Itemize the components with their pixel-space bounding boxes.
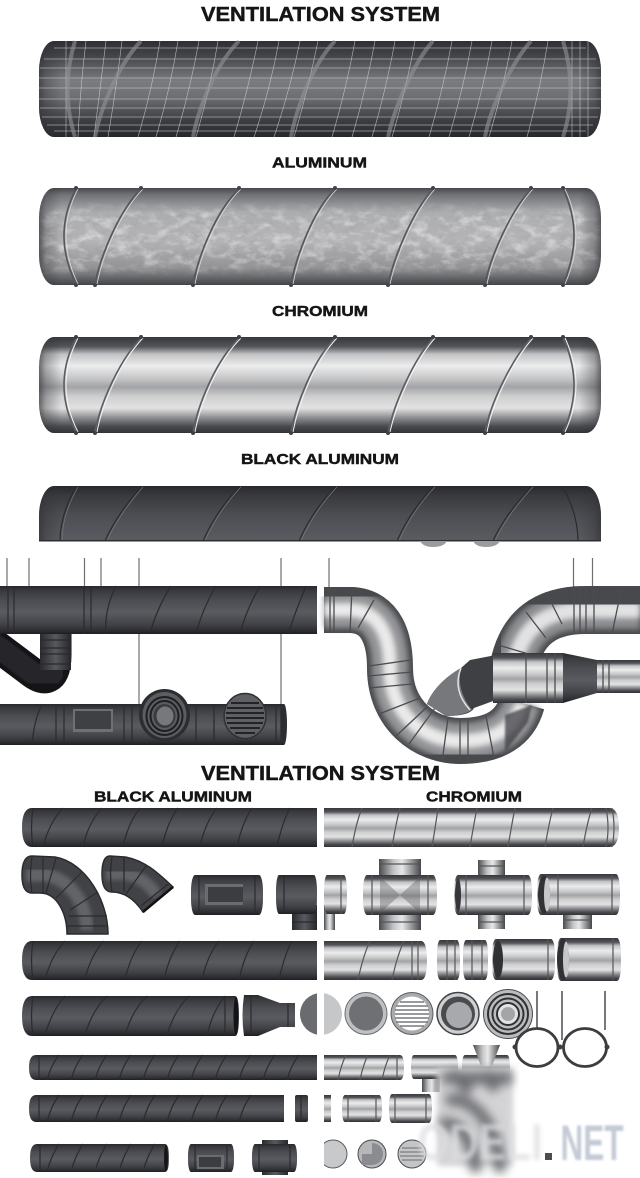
black aluminum parts [22, 808, 342, 1175]
row 6 coupling [295, 1095, 308, 1122]
disc half [300, 993, 317, 1035]
duct assembly: black aluminum [0, 586, 317, 745]
subtitle: chromium: CHROMIUM [426, 788, 522, 806]
elbow small [102, 856, 173, 912]
small cross [252, 1140, 297, 1175]
chrome reducer run [493, 653, 640, 703]
row 4 pipe [22, 996, 239, 1036]
disc louvre [391, 992, 433, 1034]
row 1 pipe [22, 808, 317, 847]
row 7 discs [319, 1140, 426, 1168]
disc half [324, 993, 342, 1035]
lower dark pipe [0, 704, 287, 745]
title: parts: VENTILATION SYSTEM [201, 763, 440, 785]
rising chrome bend [498, 586, 640, 665]
tee half [276, 875, 317, 930]
pipe: chromium [39, 337, 601, 433]
row 6 couplings [324, 1094, 432, 1123]
watermark [418, 1068, 624, 1172]
tee 2 [454, 860, 532, 929]
disc plain [345, 992, 387, 1034]
ghost lettering: ODELI [418, 1114, 542, 1172]
tee half [324, 875, 347, 930]
pipe: black aluminum [39, 486, 601, 547]
cross fitting [363, 859, 437, 930]
hanger rods [7, 558, 592, 705]
row 7 pipe [30, 1144, 169, 1172]
disc ring [437, 992, 479, 1034]
vent pipe [191, 875, 263, 915]
pipe: aluminum [39, 188, 601, 285]
tee 3 [537, 874, 620, 929]
title: top: VENTILATION SYSTEM [201, 4, 440, 26]
hanger rings [515, 991, 607, 1066]
rectangular vent [73, 709, 113, 732]
chromium parts [300, 808, 621, 1168]
row 3 pipe [324, 941, 427, 980]
round diffuser [139, 689, 190, 741]
row 1 pipe [324, 808, 619, 847]
label: aluminum: ALUMINUM [272, 154, 367, 172]
small vent [188, 1144, 234, 1172]
winding chrome bend [324, 587, 532, 763]
chrome elbow [427, 655, 496, 716]
subtitle: black aluminum: BLACK ALUMINUM [94, 788, 252, 806]
louvre grille [224, 694, 266, 738]
label: black aluminum: BLACK ALUMINUM [241, 451, 399, 468]
row 3 pipe [22, 941, 317, 980]
row 5 tee up [462, 1045, 510, 1079]
row 6 pipe [29, 1095, 284, 1122]
reducer [242, 995, 295, 1036]
label: chromium: CHROMIUM [272, 303, 368, 320]
row 5 pipe [29, 1055, 317, 1080]
row 5 tee down [411, 1055, 458, 1092]
dark elbow [0, 624, 71, 678]
duct assembly: chromium [324, 586, 640, 763]
elbow large [22, 856, 108, 934]
couplings [437, 938, 621, 981]
pipe: wireframe [39, 41, 601, 137]
upper dark pipe [0, 586, 317, 634]
disc diffuser [484, 990, 532, 1038]
row 5 pipe [324, 1055, 404, 1080]
